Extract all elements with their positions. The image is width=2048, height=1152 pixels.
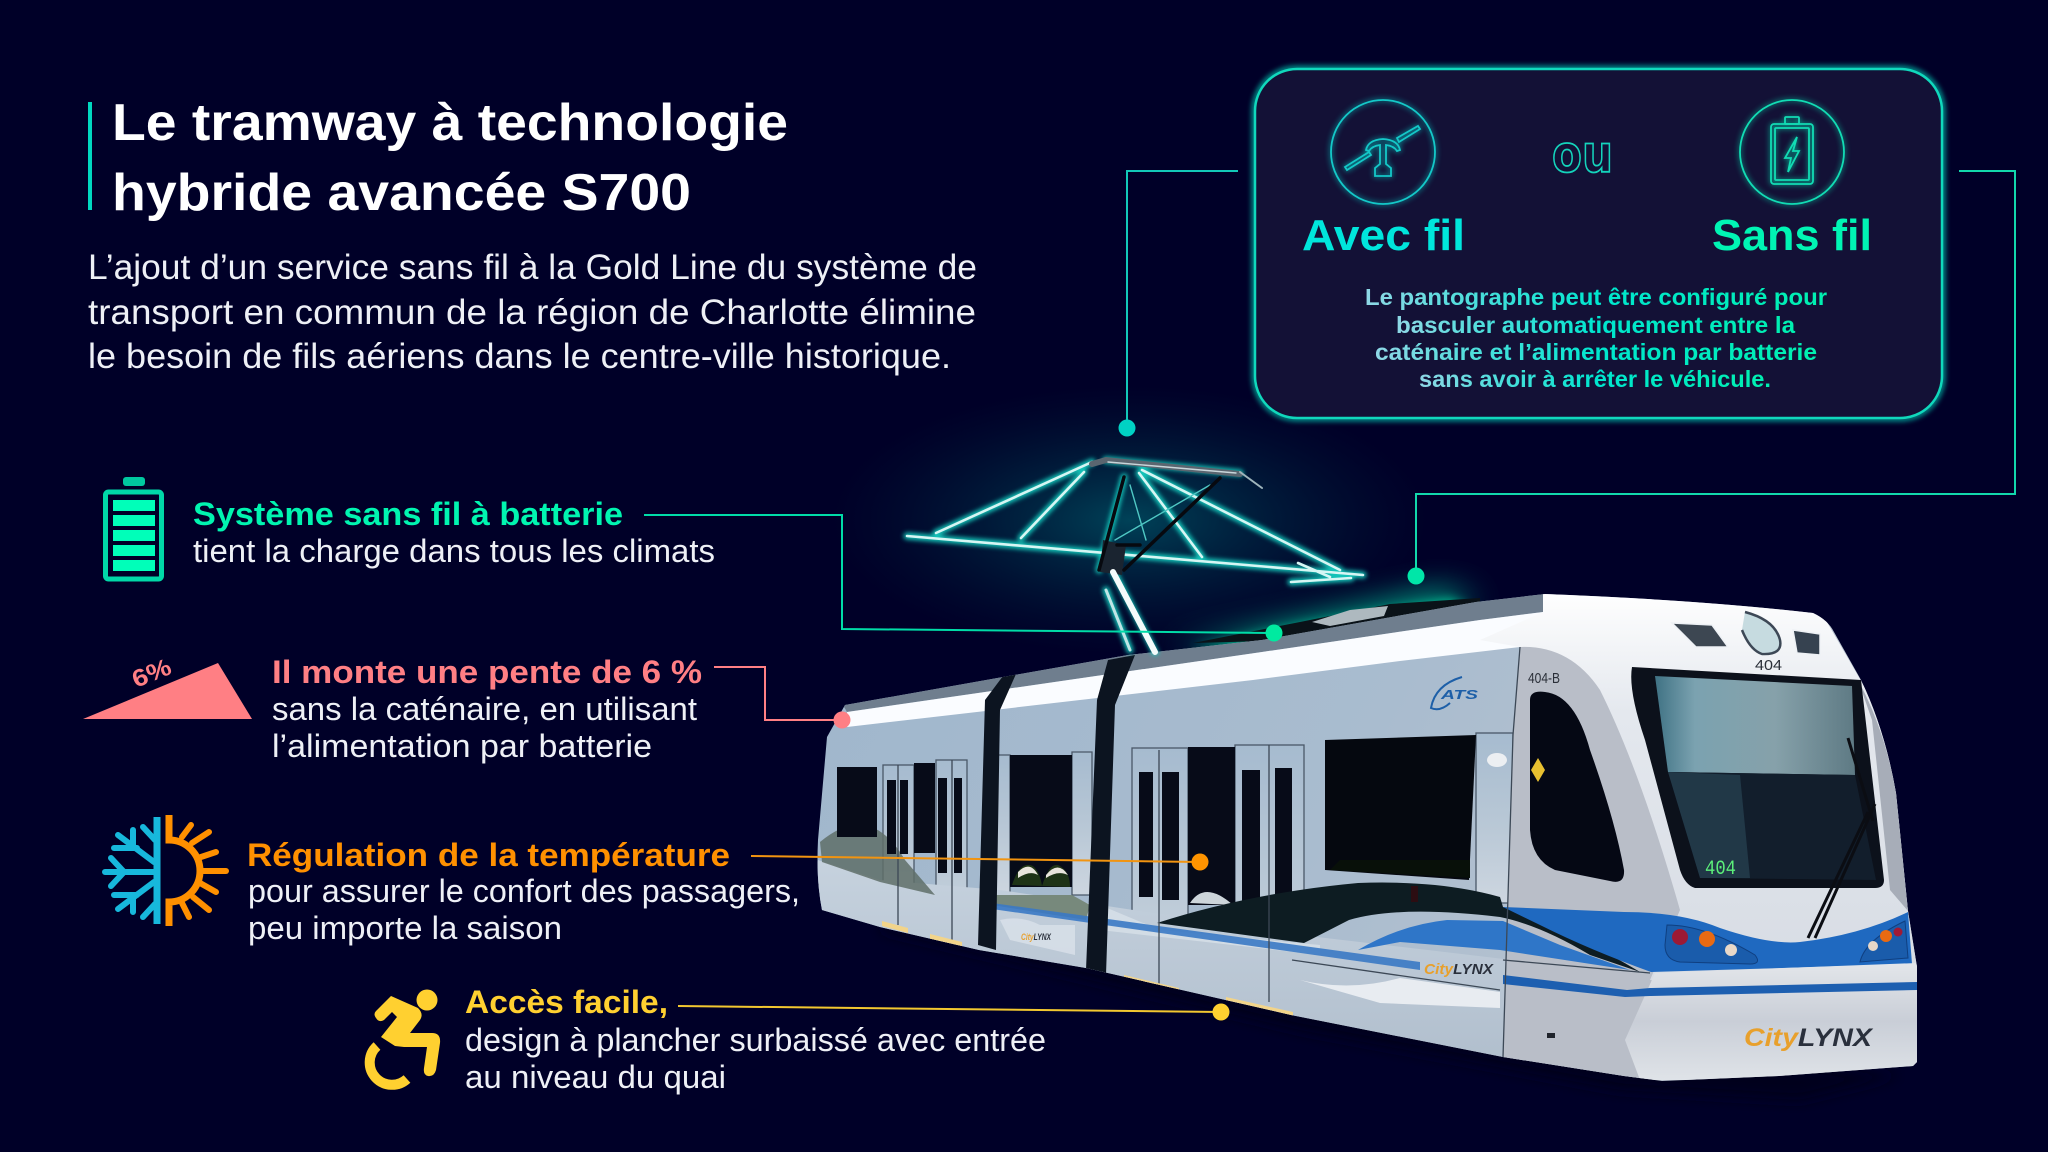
- feature: battery text: Système sans fil à batterie: [193, 496, 623, 532]
- lower body reflections: [800, 825, 1640, 1090]
- door handle: [1487, 753, 1507, 767]
- diagonal blue stripe: [992, 903, 1420, 970]
- intro text: transport en commun de la région de Charlotte élimine: [88, 293, 976, 332]
- tram labels: [1021, 657, 1874, 1052]
- dot: temperature: [1192, 854, 1208, 870]
- tram body base: [800, 580, 1930, 1090]
- panel description: sans avoir à arrêter le véhicule.: [1419, 366, 1771, 392]
- cab side window: [1530, 692, 1624, 882]
- feature: slope text: l’alimentation par batterie: [272, 728, 652, 764]
- icon: 6% slope: 6%: [128, 654, 175, 694]
- dot: wired: [1118, 420, 1136, 436]
- window reflections: [1012, 860, 1470, 905]
- pantograph hub: [1100, 540, 1126, 575]
- feature: access text: au niveau du quai: [465, 1059, 726, 1095]
- connector: wireless: [1416, 171, 2015, 575]
- connector: battery to roof: [644, 515, 1274, 633]
- dot: battery on roof: [1266, 624, 1282, 642]
- icon: accessible wheelchair: [370, 990, 440, 1085]
- panel description: basculer automatiquement entre la: [1396, 312, 1795, 338]
- tram labels: ATS: [1440, 687, 1478, 702]
- panel lines: [898, 647, 1650, 1057]
- dark swoosh: [1157, 883, 1640, 972]
- dot: wireless: [1408, 568, 1424, 584]
- feature: slope text: sans la caténaire, en utilisant: [272, 691, 697, 727]
- feature: access text: [465, 984, 1046, 1095]
- front roof vents: [1672, 612, 1820, 655]
- blue stripes: [1503, 975, 1917, 997]
- icon: 6% slope: [83, 654, 252, 719]
- tram labels: 404: [1755, 657, 1782, 674]
- connector: temperature: [751, 856, 1200, 862]
- ou: ou: [1552, 125, 1613, 185]
- small details: [1411, 886, 1555, 1038]
- panel description: Le pantographe peut être configuré pour: [1365, 284, 1827, 310]
- tram labels: 404: [1705, 858, 1736, 881]
- accent bar: [88, 102, 92, 210]
- panel description: caténaire et l’alimentation par batterie: [1375, 339, 1817, 365]
- black rods: [1099, 477, 1220, 570]
- wiper: [1808, 738, 1875, 938]
- icon: pantograph in circle: [1331, 100, 1435, 204]
- tram labels: City LYNX: [1744, 1024, 1874, 1052]
- door panels: [883, 733, 1513, 1003]
- rear and centre door windows: [837, 747, 1292, 905]
- panel description: [1365, 284, 1827, 392]
- feature: access text: design à plancher surbaissé avec entrée: [465, 1022, 1046, 1058]
- door step lights: [882, 921, 1293, 1017]
- Avec fil: Avec fil: [1302, 211, 1465, 260]
- icon: battery: [106, 477, 162, 579]
- glow behind pantograph and roof: [830, 385, 1480, 655]
- title: hybride avancée S700: [112, 164, 691, 222]
- tram labels: 404-B: [1528, 670, 1560, 687]
- intro text: le besoin de fils aériens dans le centre-ville historique.: [88, 337, 951, 376]
- feature: slope text: Il monte une pente de 6 %: [272, 654, 702, 690]
- connector: access: [678, 1006, 1221, 1012]
- articulations: [978, 655, 1135, 975]
- intro text: [88, 248, 977, 376]
- icon: battery in circle: [1740, 100, 1844, 204]
- white roof stripe: [847, 612, 1543, 727]
- feature: temperature text: peu importe la saison: [248, 910, 562, 946]
- panel: wired or wireless: [1255, 69, 1942, 418]
- title: [112, 94, 788, 222]
- feature: battery text: [193, 496, 715, 569]
- feature: battery text: tient la charge dans tous les climats: [193, 533, 715, 569]
- title: Le tramway à technologie: [112, 94, 788, 152]
- panel box: [1255, 69, 1942, 418]
- dot: slope: [834, 712, 850, 728]
- side window: [1325, 735, 1476, 880]
- pantograph head bar: [1092, 460, 1240, 474]
- snow half: [105, 817, 157, 924]
- panel glow: [1255, 69, 1942, 418]
- sun half: [169, 815, 226, 926]
- connector: slope: [714, 667, 842, 720]
- bumper: [1625, 963, 1930, 1080]
- feature: access text: Accès facile,: [465, 984, 668, 1020]
- roof equipment: [1193, 598, 1480, 643]
- front lights: [1665, 921, 1908, 964]
- tram labels: CityLYNX: [1021, 932, 1052, 942]
- pantograph: [907, 460, 1363, 652]
- icon: snow and sun: [105, 815, 226, 926]
- tram: [800, 580, 1930, 1090]
- cab shell: [1504, 646, 1646, 1079]
- pantograph glow: [907, 460, 1363, 652]
- shadow under tram: [880, 900, 1900, 1100]
- feature: temperature text: Régulation de la température: [247, 837, 730, 873]
- pantograph frame: [907, 462, 1363, 582]
- Sans fil: Sans fil: [1712, 211, 1872, 260]
- yellow diamond sign: [1531, 758, 1545, 782]
- feature: temperature text: pour assurer le confort des passagers,: [248, 873, 800, 909]
- blue swoosh: [1358, 920, 1630, 970]
- windshield: [1631, 667, 1884, 888]
- intro text: L’ajout d’un service sans fil à la Gold Line du système de: [88, 248, 977, 287]
- feature: slope text: [272, 654, 702, 764]
- feature: temperature text: [247, 837, 800, 946]
- roof band: [840, 590, 1548, 712]
- connector: wired: [1127, 171, 1238, 427]
- tram labels: CityLYNX: [1424, 961, 1494, 978]
- lower arm: [1113, 572, 1155, 652]
- dot: access: [1212, 1004, 1230, 1020]
